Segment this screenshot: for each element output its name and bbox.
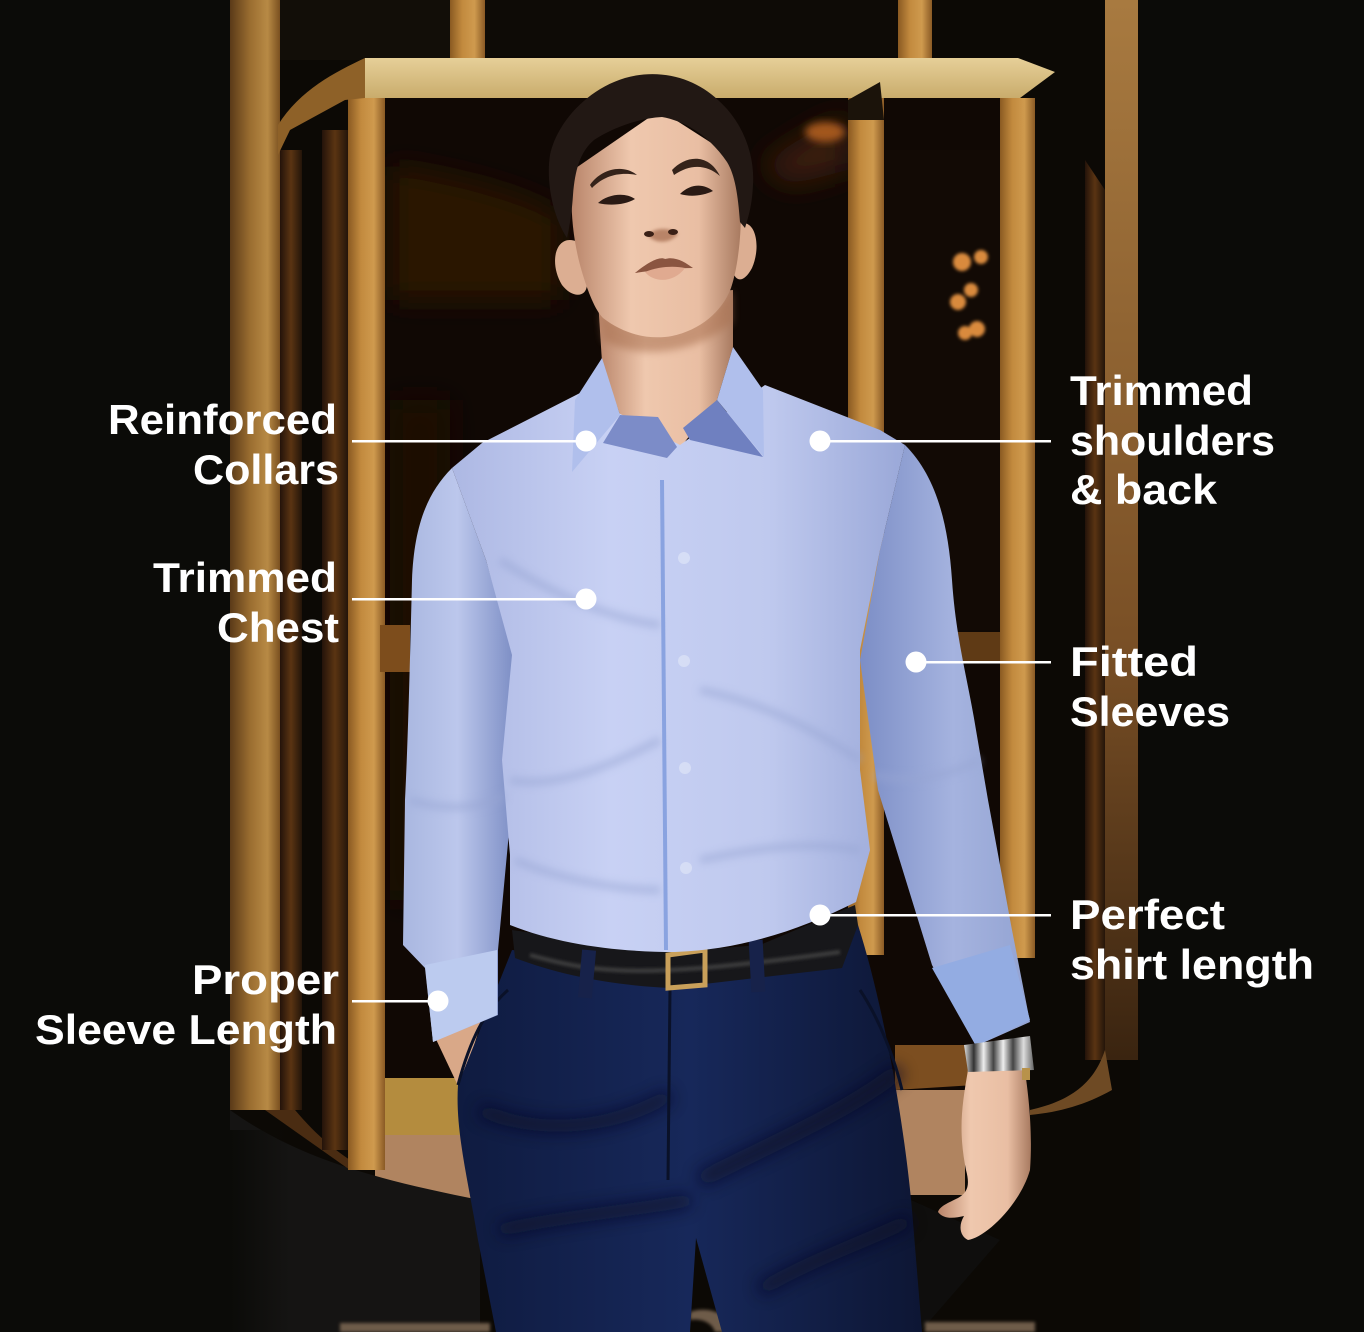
buttons <box>678 552 692 874</box>
callout: Proper Sleeve Length: Proper <box>192 956 339 1003</box>
callout: Reinforced Collars <box>108 396 596 493</box>
callout: Reinforced Collars: Reinforced <box>108 396 337 443</box>
mouth <box>635 258 693 273</box>
hair <box>549 74 753 238</box>
cuffs <box>425 950 497 1042</box>
callout: Fitted Sleeves <box>906 638 1230 735</box>
right hand <box>938 1065 1031 1240</box>
bokeh lights <box>950 250 988 340</box>
callout: Trimmed shoulders & back: & back <box>1070 466 1218 513</box>
person <box>403 74 1034 1332</box>
callout: Reinforced Collars: Collars <box>193 446 339 493</box>
nose <box>644 229 678 242</box>
callout: Perfect shirt length: Perfect <box>1070 891 1225 938</box>
photo backdrop: revolving door <box>230 0 1140 1332</box>
door bases <box>378 1078 470 1135</box>
watch <box>964 1036 1034 1080</box>
left sleeve <box>403 468 512 1042</box>
columns <box>230 0 280 1110</box>
callout: Trimmed shoulders & back: Trimmed <box>1070 367 1253 414</box>
callout: Proper Sleeve Length: Sleeve Length <box>35 1006 337 1053</box>
callout: Proper Sleeve Length <box>35 956 448 1053</box>
shirt torso <box>452 385 905 952</box>
ears <box>555 223 757 295</box>
collar <box>572 347 764 472</box>
callout: Trimmed Chest: Chest <box>217 604 339 651</box>
belt <box>512 905 858 999</box>
callout: Trimmed shoulders & back <box>810 367 1275 513</box>
placket <box>662 480 666 950</box>
trouser folds <box>480 1070 910 1290</box>
horizontal door rails <box>380 625 410 672</box>
callout: Trimmed shoulders & back: shoulders <box>1070 417 1275 464</box>
callout: Perfect shirt length: shirt length <box>1070 941 1314 988</box>
callout: Perfect shirt length <box>810 891 1314 988</box>
canopy <box>365 58 1055 98</box>
callout: Trimmed Chest <box>153 554 596 651</box>
neck <box>598 290 733 452</box>
trousers <box>458 925 922 1332</box>
eyes <box>598 186 713 205</box>
eyebrows <box>590 159 720 188</box>
callout: Fitted Sleeves: Fitted <box>1070 638 1198 685</box>
callout: Fitted Sleeves: Sleeves <box>1070 688 1230 735</box>
callout: Trimmed Chest: Trimmed <box>153 554 337 601</box>
left hand in pocket <box>434 1020 482 1090</box>
edge fades <box>230 1130 290 1332</box>
right sleeve <box>860 445 1030 1046</box>
face <box>572 110 741 337</box>
floor <box>375 1090 965 1200</box>
shirt folds <box>410 560 980 890</box>
carpet pattern <box>340 1310 1035 1332</box>
